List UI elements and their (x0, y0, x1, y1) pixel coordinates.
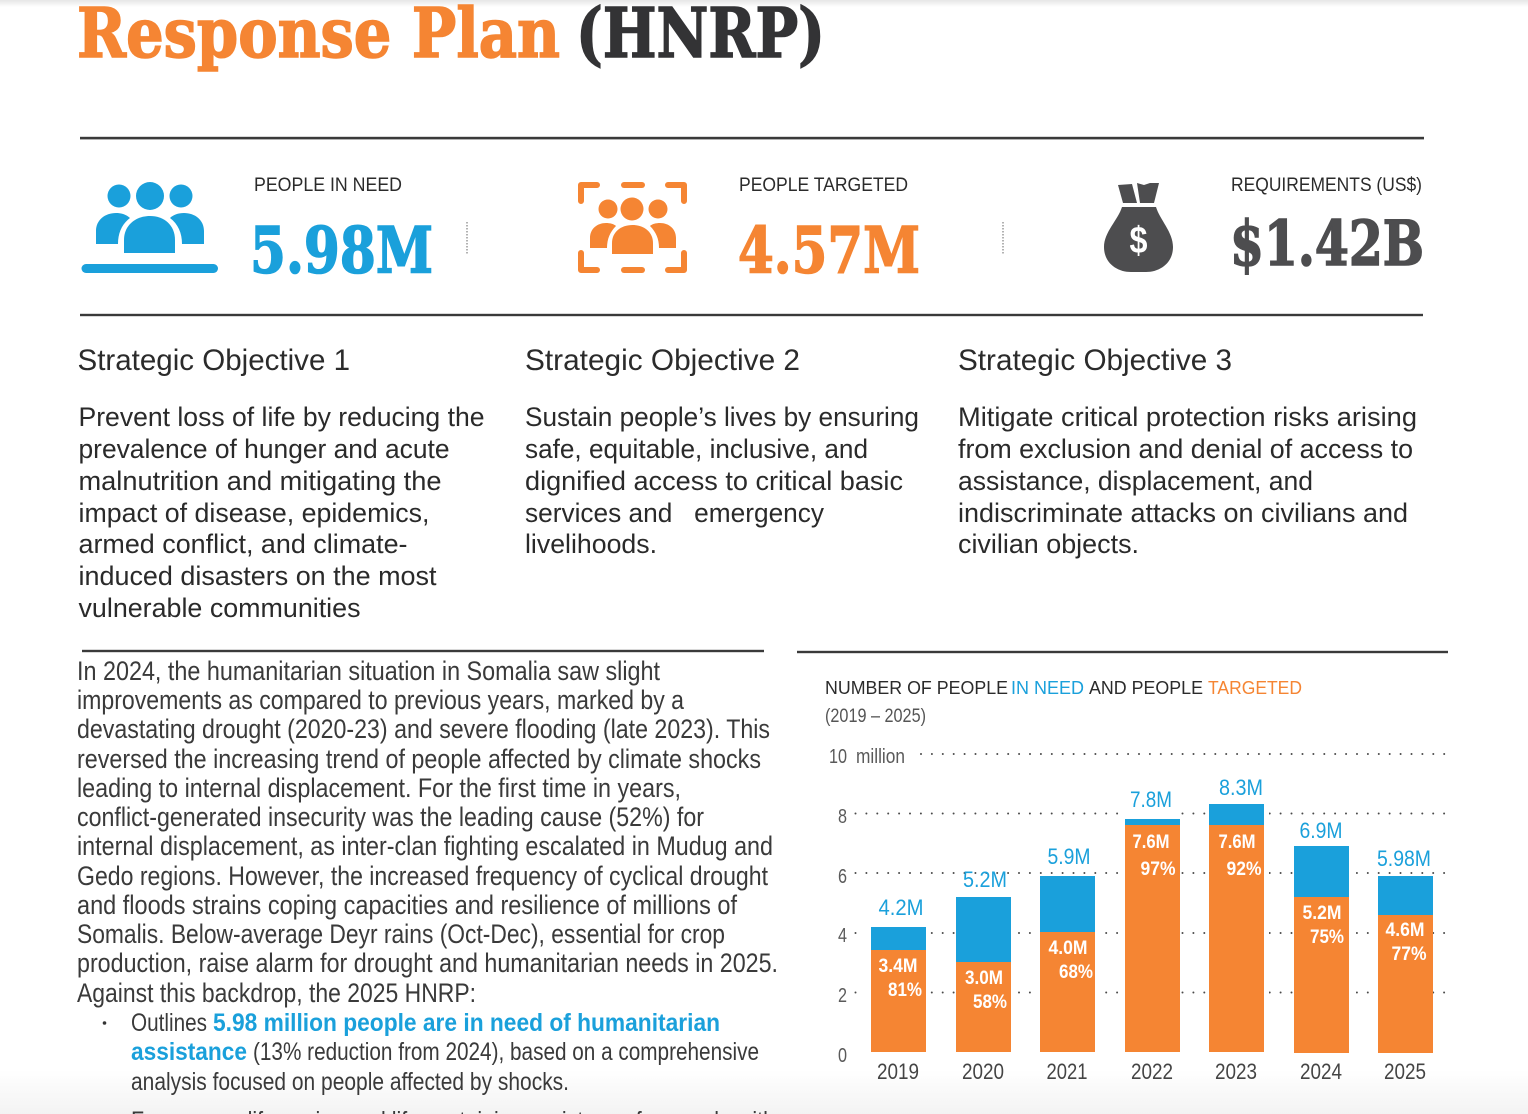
text: objective 1: armed conflict, and climate- (78, 529, 408, 559)
chart title: AND PEOPLE (1089, 678, 1203, 698)
text: objective 1: Prevent loss of life by reducing the (78, 402, 484, 432)
bar: 2022: 7.6M (1132, 832, 1170, 853)
text: objective 3: from exclusion and denial of access to (958, 434, 1413, 464)
text block: situation overview: improvements as compared to previous years, marked by a (77, 685, 685, 715)
y axis: 10 (829, 746, 847, 768)
text block: situation overview: reversed the increasing trend of people affected by climate shocks (77, 744, 761, 774)
bar: 2019: 81% (888, 980, 922, 1001)
text: objective 2: livelihoods. (525, 529, 657, 559)
bar: 2021: 2021 (1046, 1059, 1088, 1084)
bar: 2019: 4.2M (878, 895, 924, 920)
bar chart: people in need and targeted (829, 746, 1449, 1084)
bar: 2022 (1125, 787, 1180, 1084)
label: requirements: REQUIREMENTS (US$) (1231, 175, 1422, 196)
value: 5.98M: 5.98M (250, 214, 433, 288)
bar: 2024 (1294, 818, 1349, 1084)
text: objective 1: impact of disease, epidemics, (78, 498, 430, 528)
panel: people targeted (581, 175, 920, 288)
text: objective 3: Mitigate critical protection risks arising (958, 402, 1417, 432)
chart title: NUMBER OF PEOPLE (825, 678, 1008, 698)
text block: situation overview: Against this backdrop, the 2025 HNRP: (77, 978, 476, 1008)
chart title (825, 678, 1302, 727)
label: people targeted: PEOPLE TARGETED (739, 175, 908, 196)
bar: 2022: 7.8M (1130, 787, 1172, 812)
text block: situation overview: devastating drought (2020-23) and severe flooding (late 2023). This (77, 714, 770, 744)
text block: situation overview: In 2024, the humanitarian situation in Somalia saw slight (77, 656, 660, 686)
heading: objective 1: Strategic Objective 1 (78, 344, 350, 377)
icon: money bag: $ (1130, 220, 1148, 262)
text: objective 1: vulnerable communities (78, 593, 360, 623)
y axis: 8 (838, 806, 847, 828)
y axis: 4 (838, 925, 847, 947)
bar: 2019: 3.4M (878, 956, 918, 977)
text block: situation overview: production, raise alarm for drought and humanitarian needs in 2025. (77, 948, 778, 978)
text block: situation overview: leading to internal displacement. For the first time in years, (77, 773, 681, 803)
bar: 2021 (1040, 844, 1095, 1084)
text: objective 3: indiscriminate attacks on civilians and (958, 498, 1408, 528)
text: objective 1: prevalence of hunger and acute (78, 434, 450, 464)
bar: 2020: 58% (973, 992, 1007, 1013)
panel: requirements (1104, 175, 1424, 280)
chart title: (2019 – 2025) (825, 706, 926, 727)
icon: people in need (82, 182, 218, 273)
bar: 2023 (1209, 775, 1264, 1084)
bar: 2023: 8.3M (1219, 775, 1263, 800)
text: objective 3: civilian objects. (958, 529, 1139, 559)
text block: situation overview (77, 656, 778, 1008)
label: people in need: PEOPLE IN NEED (254, 175, 402, 196)
panel: people in need (82, 175, 433, 288)
chart title: IN NEED (1011, 678, 1084, 698)
bullet list: (13% reduction from 2024), based on a comprehensive (253, 1038, 759, 1066)
bar: 2023: 7.6M (1218, 832, 1256, 853)
bar: 2021: 68% (1059, 962, 1093, 983)
bar: 2020: 5.2M (963, 867, 1007, 892)
bar: 2020: 2020 (962, 1059, 1004, 1084)
bar: 2024: 5.2M (1302, 903, 1342, 924)
text: objective 2: safe, equitable, inclusive, and (525, 434, 868, 464)
bar: 2025: 77% (1392, 944, 1427, 965)
bullet list (103, 1009, 775, 1114)
bar: 2025: 2025 (1384, 1059, 1426, 1084)
icon: people targeted (581, 185, 684, 270)
bullet list: 5.98 million people are in need of humanitarian (213, 1009, 720, 1037)
bar: 2023: 92% (1226, 859, 1262, 880)
bar: 2022: 97% (1140, 859, 1176, 880)
icon: money bag (1104, 183, 1173, 272)
bar: 2024: 6.9M (1300, 818, 1342, 843)
panel: strategic objective 2 (525, 344, 919, 559)
text: objective 3: assistance, displacement, and (958, 466, 1313, 496)
bar: 2025: 5.98M (1377, 846, 1431, 871)
heading: objective 3: Strategic Objective 3 (958, 344, 1232, 377)
y axis: million (856, 746, 905, 768)
bar: 2025 (1377, 846, 1433, 1084)
text block: situation overview: Gedo regions. However, the increased frequency of cyclical drought (77, 861, 768, 891)
bullet list: Outlines (131, 1009, 207, 1037)
bar: 2021: 5.9M (1048, 844, 1090, 869)
y axis (829, 746, 905, 1067)
text block: situation overview: and floods strains coping capacities and resilience of millions of (77, 890, 737, 920)
text: objective 2: Sustain people’s lives by ensuring (525, 402, 919, 432)
bullet list: analysis focused on people affected by shocks. (131, 1068, 569, 1096)
bar: 2024: 75% (1310, 927, 1344, 948)
bar: 2019: 2019 (877, 1059, 919, 1084)
panel: strategic objective 3 (958, 344, 1417, 559)
bar: 2025: 4.6M (1386, 920, 1424, 941)
value: $1.42B: $1.42B (1230, 207, 1424, 280)
y axis: 0 (838, 1045, 847, 1067)
text: objective 1 (78, 402, 484, 623)
y axis: 2 (838, 985, 847, 1007)
text: objective 2: dignified access to critical basic (525, 466, 903, 496)
bar: 2019 (871, 895, 926, 1084)
panel: strategic objective 1 (78, 344, 484, 623)
bar: 2021: 4.0M (1048, 938, 1088, 959)
text: objective 3 (958, 402, 1417, 559)
text block: situation overview: conflict-generated insecurity was the leading cause (52%) for (77, 802, 704, 832)
text: objective 1: induced disasters on the most (78, 561, 437, 591)
text block: situation overview: internal displacement, as inter-clan fighting escalated in Mudug and (77, 831, 773, 861)
bar: 2022: 2022 (1131, 1059, 1173, 1084)
text: objective 2 (525, 402, 919, 559)
text block: situation overview: Somalis. Below-average Deyr rains (Oct-Dec), essential for crop (77, 919, 725, 949)
bar: 2024: 2024 (1300, 1059, 1342, 1084)
bar: 2023: 2023 (1215, 1059, 1257, 1084)
bullet list: assistance (131, 1038, 247, 1066)
heading: objective 2: Strategic Objective 2 (525, 344, 800, 377)
text: objective 2: services and emergency (525, 498, 824, 528)
y axis: 6 (838, 866, 847, 888)
bar: 2020 (956, 867, 1011, 1084)
text: objective 1: malnutrition and mitigating the (78, 466, 442, 496)
bar: 2020: 3.0M (965, 968, 1003, 989)
chart title: TARGETED (1208, 678, 1302, 698)
value: 4.57M: 4.57M (738, 214, 920, 288)
